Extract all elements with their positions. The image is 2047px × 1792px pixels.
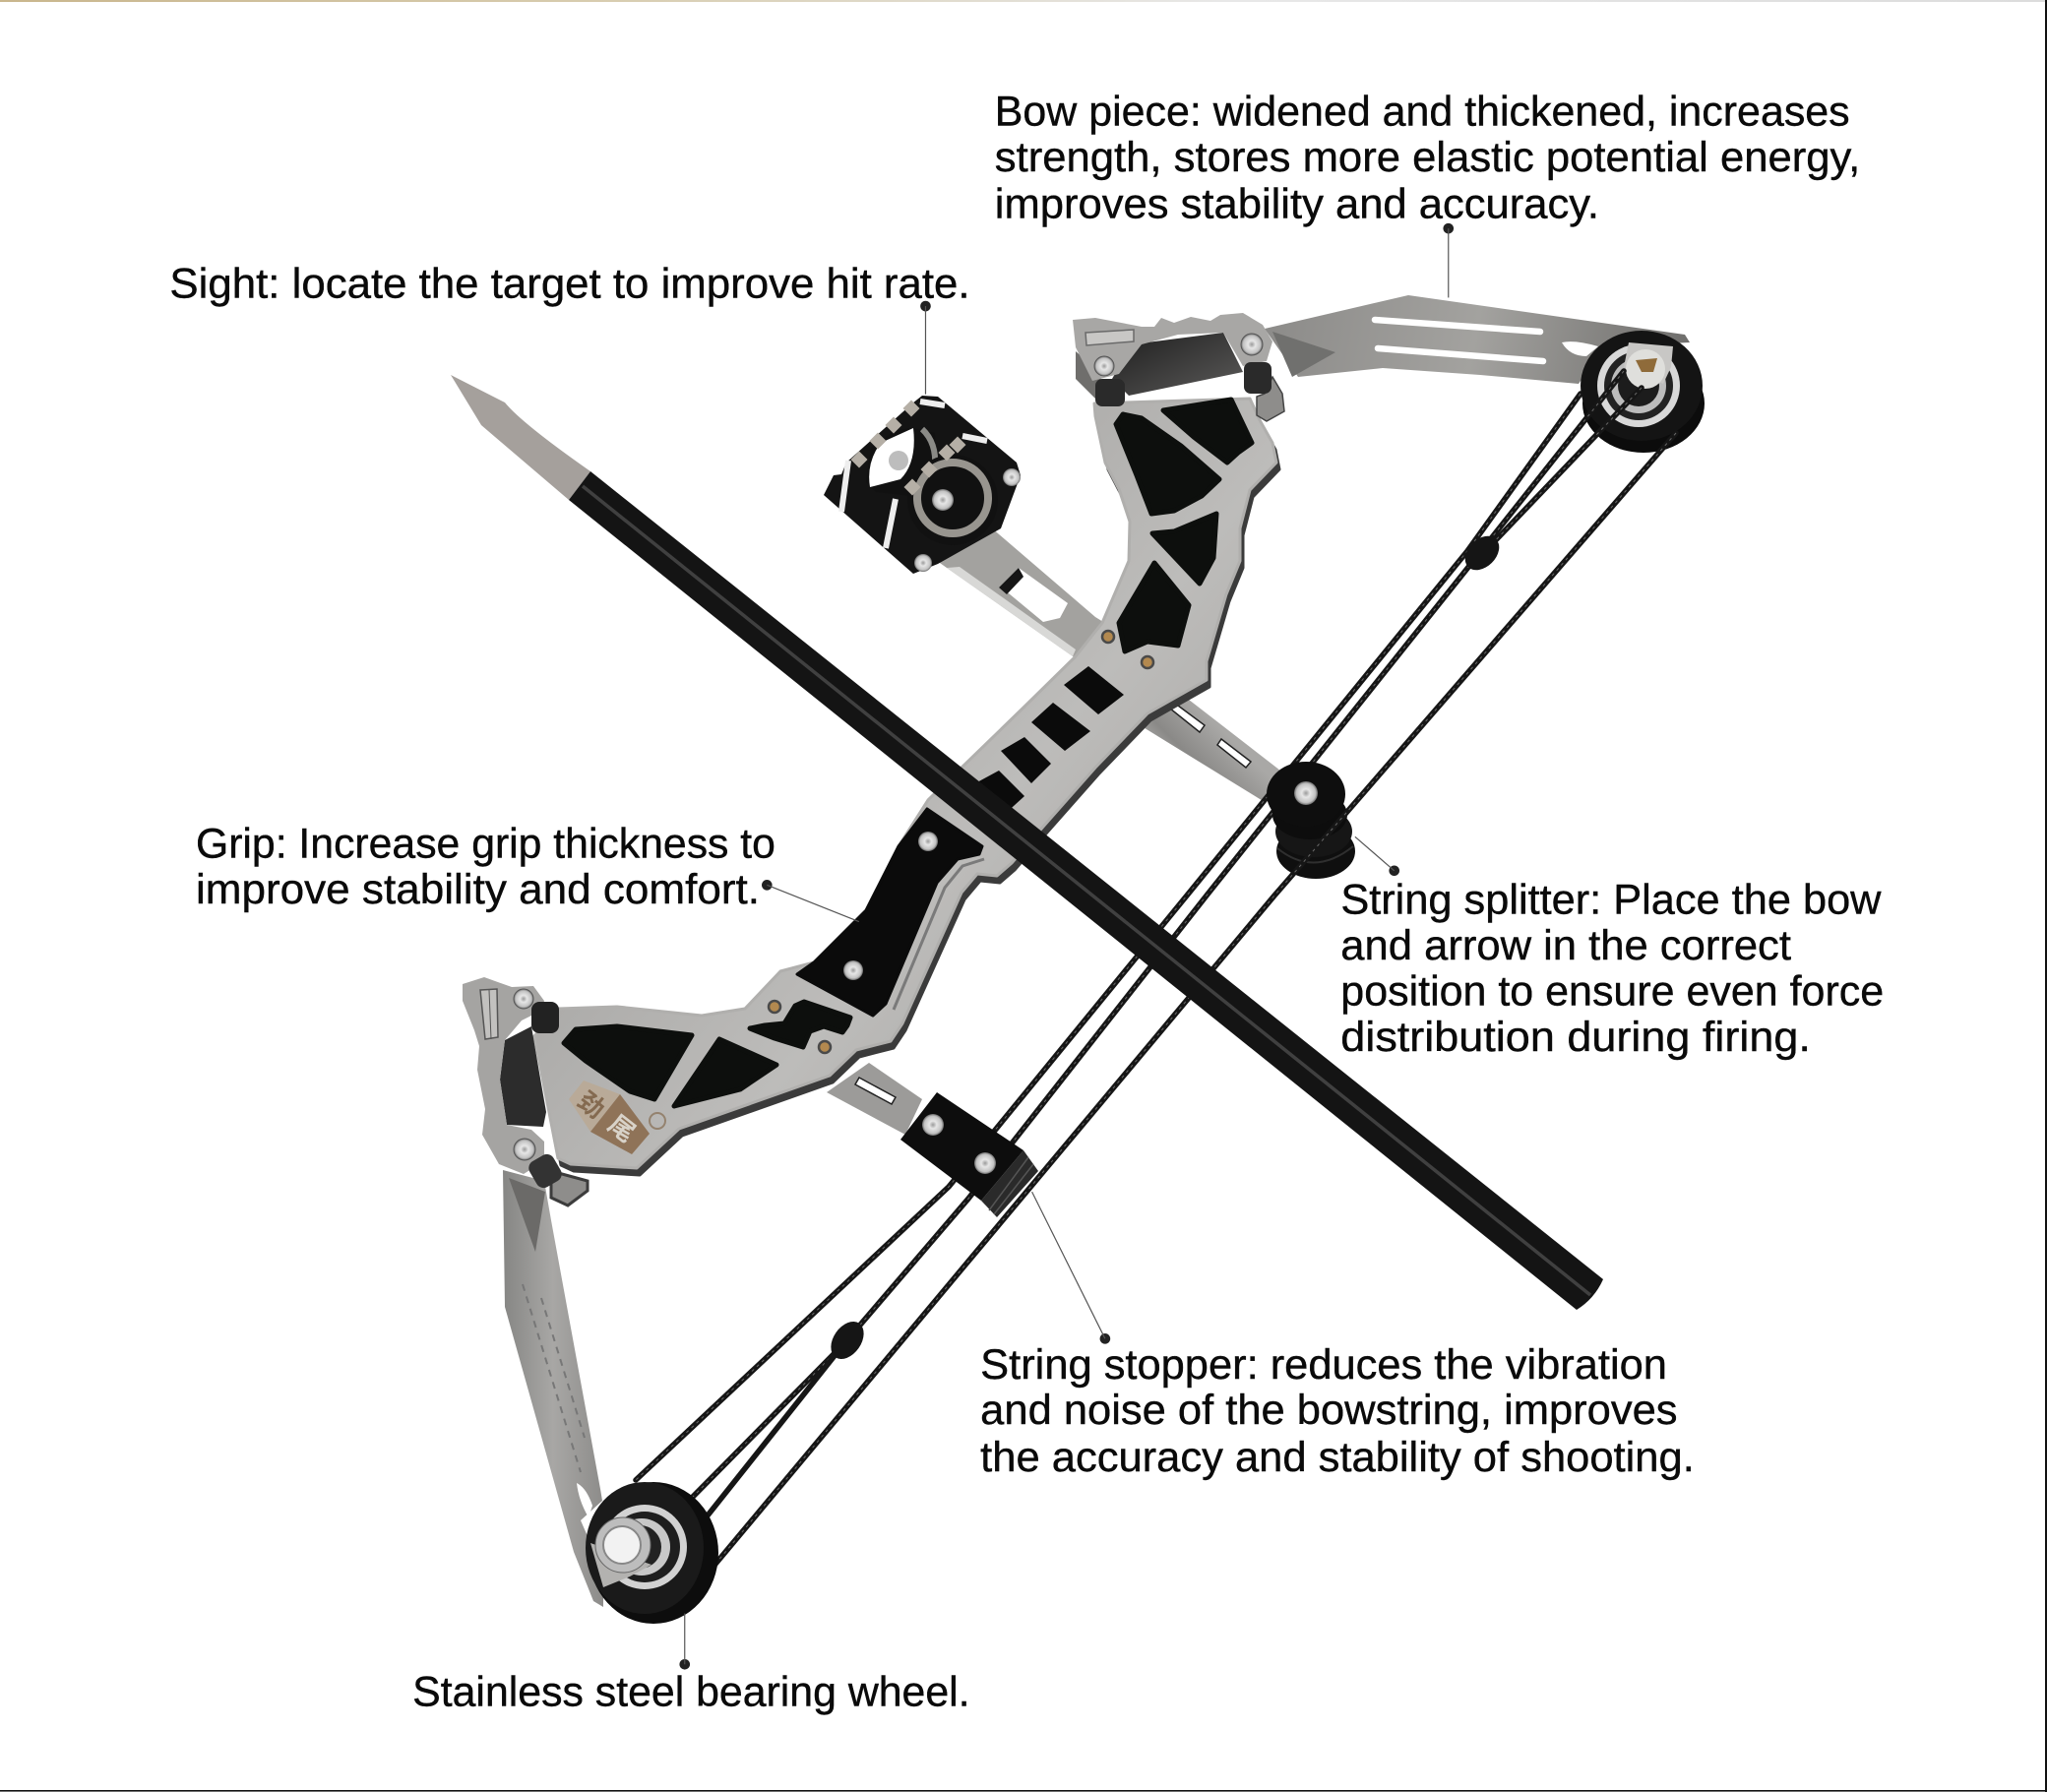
left lens ring <box>866 428 936 497</box>
pocket screw <box>1094 356 1114 376</box>
stopper mounting bar <box>827 1063 922 1135</box>
upper limb pocket <box>1073 313 1284 421</box>
right lens ring <box>907 455 998 545</box>
pocket screw <box>1241 334 1263 355</box>
logo: 劲 <box>571 1081 613 1126</box>
callout: string splitter: distribution during firing. <box>1340 1014 1811 1060</box>
callout: string splitter <box>1340 836 1884 1060</box>
riser shadow <box>537 405 1279 1175</box>
sight <box>824 396 1021 574</box>
callout: bearing wheel <box>412 1614 970 1715</box>
callout: bearing wheel: Stainless steel bearing wheel. <box>412 1669 970 1715</box>
pocket screw <box>514 989 533 1009</box>
lower wheel <box>586 1482 718 1624</box>
string stopper <box>900 1092 1038 1217</box>
upper window 1 <box>1116 414 1219 514</box>
callout: string stopper: and noise of the bowstring, improves <box>980 1387 1678 1433</box>
brass screw <box>819 1041 831 1053</box>
lower limb <box>503 1170 603 1607</box>
top accent strip <box>0 0 2047 2</box>
upper window 4 <box>1119 563 1189 651</box>
string knot <box>824 1316 871 1365</box>
callout: bow piece: improves stability and accuracy. <box>995 181 1599 227</box>
upper window 3 <box>1152 514 1216 584</box>
frame border bottom <box>0 1790 2047 1792</box>
callout: string splitter: String splitter: Place the bow <box>1340 877 1882 923</box>
callout: string splitter: position to ensure even force <box>1340 967 1884 1014</box>
callout: sight <box>169 260 970 395</box>
brass screw <box>1102 631 1114 643</box>
splitter <box>1267 762 1355 879</box>
grip <box>797 809 984 1016</box>
grip screw <box>843 960 863 980</box>
lower window B <box>674 1039 776 1106</box>
arrow <box>451 375 1603 1310</box>
callout: grip: Grip: Increase grip thickness to <box>196 821 775 867</box>
arrow shaft <box>569 471 1603 1310</box>
callout: string stopper: String stopper: reduces the vibration <box>980 1341 1667 1388</box>
logo <box>569 1081 665 1154</box>
illustration: compound bow <box>451 295 1705 1624</box>
grip screw <box>918 832 938 851</box>
lower limb pocket <box>463 977 588 1205</box>
brass screw <box>769 1001 780 1013</box>
sight teeth <box>851 401 965 495</box>
callout: bow piece: Bow piece: widened and thickened, increases <box>995 88 1850 134</box>
splitter mounting bar <box>1142 693 1289 802</box>
pocket screw <box>514 1139 535 1160</box>
callout: bow piece <box>995 88 1860 297</box>
callout: bow piece: strength, stores more elastic potential energy, <box>995 134 1860 180</box>
upper limb <box>1265 295 1690 384</box>
callout: string splitter: and arrow in the correct <box>1340 922 1791 968</box>
logo: 尾 <box>601 1105 644 1149</box>
bow strings A and B <box>636 371 1642 1515</box>
upper wheel <box>1581 331 1705 453</box>
arrow head <box>451 375 590 500</box>
brass screw <box>1142 656 1153 668</box>
bow string C <box>712 433 1676 1569</box>
riser body <box>534 399 1276 1168</box>
callout: string stopper <box>980 1192 1695 1480</box>
upper window 2 <box>1163 400 1252 463</box>
string knot <box>1458 529 1506 577</box>
lower window C <box>750 1002 850 1047</box>
square cutouts <box>975 666 1124 816</box>
frame border right <box>2045 0 2047 1792</box>
callout: string stopper: the accuracy and stability of shooting. <box>980 1434 1695 1480</box>
callout: grip <box>196 821 859 922</box>
lower window A <box>564 1026 692 1099</box>
sight mounting bar <box>930 522 1124 671</box>
callout: grip: improve stability and comfort. <box>196 866 760 912</box>
callout: sight: Sight: locate the target to improve hit rate. <box>169 260 970 306</box>
white stripes <box>841 402 987 548</box>
